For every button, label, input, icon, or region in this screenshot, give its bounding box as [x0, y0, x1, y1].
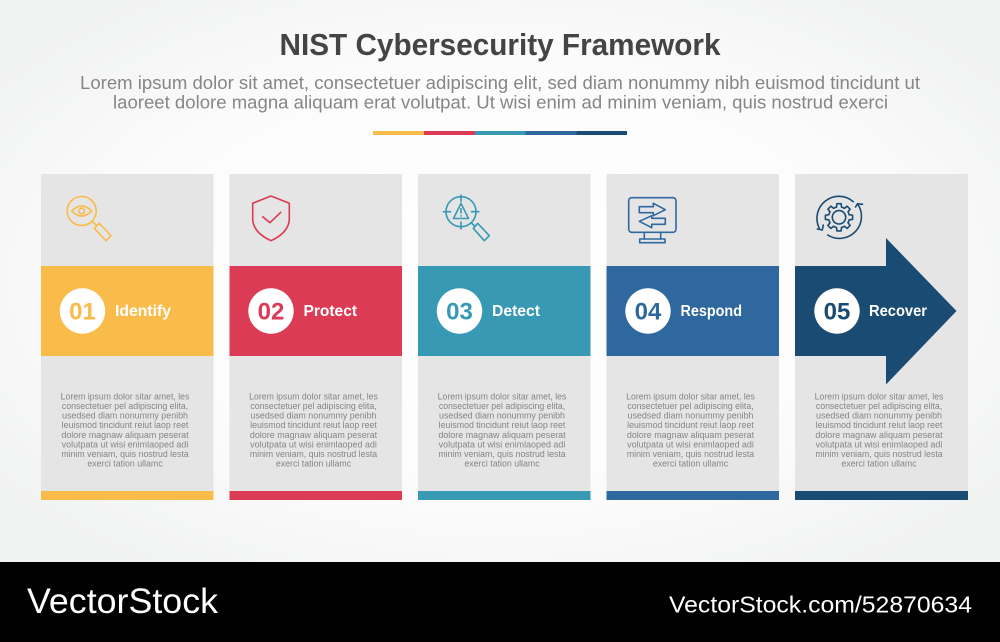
- panel: 02 Protect: [230, 174, 402, 500]
- panel: 04 Respond: [606, 174, 779, 500]
- description text: volutpata ut wisi enimlaoped adi: [250, 439, 377, 449]
- description text: minim veniam, quis nostrud lesta: [438, 449, 566, 459]
- description text: [438, 391, 567, 469]
- step label: Identify: [115, 303, 171, 320]
- description text: volutpata ut wisi enimlaoped adi: [62, 439, 188, 449]
- step label: Detect: [492, 303, 541, 320]
- description text: exerci tation ullamc: [276, 459, 352, 469]
- number badge: [814, 288, 860, 334]
- footer logo text: VectorStock: [27, 582, 219, 621]
- footer watermark bar: [0, 562, 1000, 642]
- description text: consectetuer pel adipiscing elita,: [439, 401, 565, 411]
- panel: 01 Identify: [41, 174, 214, 500]
- description text: dolore magnaw aliquam peserat: [250, 430, 378, 440]
- description text: [815, 391, 944, 469]
- description text: usedsed diam nonummy penibh: [250, 411, 376, 421]
- description text: consectetuer pel adipiscing elita,: [62, 401, 188, 411]
- description text: consectetuer pel adipiscing elita,: [627, 401, 754, 411]
- description text: [61, 391, 190, 469]
- description text: Lorem ipsum dolor sitar amet, les: [249, 391, 378, 401]
- description text: minim veniam, quis nostrud lesta: [627, 449, 754, 459]
- number badge: 03: [446, 298, 473, 326]
- description text: [249, 391, 378, 469]
- subtitle text: [80, 73, 920, 112]
- title: NIST Cybersecurity Framework: [280, 27, 721, 62]
- step label: Recover: [869, 303, 927, 320]
- description text: usedsed diam nonummy penibh: [628, 411, 754, 421]
- description text: consectetuer pel adipiscing elita,: [816, 401, 942, 411]
- number badge: [60, 288, 105, 334]
- number badge: 05: [824, 298, 850, 326]
- step label: Respond: [680, 303, 742, 320]
- description text: Lorem ipsum dolor sitar amet, les: [61, 391, 190, 401]
- panel: 05 Recover: [795, 174, 968, 500]
- bottom accent bar: [230, 491, 402, 500]
- colour band: [230, 266, 402, 356]
- description text: usedsed diam nonummy penibh: [62, 411, 188, 421]
- description text: usedsed diam nonummy penibh: [439, 411, 565, 421]
- number badge: 04: [635, 298, 662, 326]
- description text: dolore magnaw aliquam peserat: [61, 430, 189, 440]
- description text: [626, 391, 755, 469]
- arrow band: [795, 238, 956, 384]
- description text: usedsed diam nonummy penibh: [816, 411, 942, 421]
- description text: dolore magnaw aliquam peserat: [627, 430, 755, 440]
- subtitle text: laoreet dolore magna aliquam erat volutpat. Ut wisi enim ad minim veniam, quis nostrud exerci: [113, 92, 888, 112]
- description text: leuismod tincidunt reiut laop reet: [250, 420, 377, 430]
- colour band: [41, 266, 214, 356]
- icon: monitor with exchange arrows: [629, 198, 676, 243]
- bottom accent bar: [795, 491, 968, 500]
- description text: minim veniam, quis nostrud lesta: [250, 449, 377, 459]
- description text: minim veniam, quis nostrud lesta: [815, 449, 943, 459]
- bottom accent bar: [606, 491, 779, 500]
- number badge: [625, 288, 671, 334]
- description text: exerci tation ullamc: [464, 459, 540, 469]
- description text: leuismod tincidunt reiut laop reet: [439, 420, 566, 430]
- description text: leuismod tincidunt reiut laop reet: [816, 420, 943, 430]
- number badge: 02: [258, 298, 284, 326]
- colour divider bar: [373, 131, 627, 135]
- description text: exerci tation ullamc: [841, 459, 917, 469]
- description text: leuismod tincidunt reiut laop reet: [627, 420, 754, 430]
- subtitle text: Lorem ipsum dolor sit amet, consectetuer adipiscing elit, sed diam nonummy nibh euismod tincidunt ut: [80, 73, 920, 93]
- description text: Lorem ipsum dolor sitar amet, les: [626, 391, 755, 401]
- colour band: [606, 266, 779, 356]
- description text: volutpata ut wisi enimlaoped adi: [627, 439, 754, 449]
- icon: magnifier with alert target: [444, 195, 489, 241]
- icon: gear with circular arrows: [817, 196, 862, 238]
- description text: Lorem ipsum dolor sitar amet, les: [438, 391, 567, 401]
- description text: exerci tation ullamc: [87, 459, 163, 469]
- icon: magnifier with eye: [67, 196, 111, 241]
- number badge: 01: [69, 298, 96, 326]
- description text: volutpata ut wisi enimlaoped adi: [439, 439, 565, 449]
- description text: consectetuer pel adipiscing elita,: [250, 401, 377, 411]
- description text: dolore magnaw aliquam peserat: [438, 430, 566, 440]
- description text: exerci tation ullamc: [653, 459, 729, 469]
- number badge: [437, 288, 482, 334]
- colour band: [418, 266, 590, 356]
- icon: shield with check: [253, 196, 289, 241]
- description text: leuismod tincidunt reiut laop reet: [62, 420, 189, 430]
- description text: volutpata ut wisi enimlaoped adi: [816, 439, 942, 449]
- number badge: [248, 288, 294, 334]
- step label: Protect: [304, 303, 358, 320]
- description text: minim veniam, quis nostrud lesta: [61, 449, 189, 459]
- description text: dolore magnaw aliquam peserat: [815, 430, 943, 440]
- panel: 03 Detect: [418, 174, 590, 500]
- footer image id: VectorStock.com/52870634: [669, 592, 972, 618]
- description text: Lorem ipsum dolor sitar amet, les: [815, 391, 944, 401]
- bottom accent bar: [41, 491, 214, 500]
- bottom accent bar: [418, 491, 590, 500]
